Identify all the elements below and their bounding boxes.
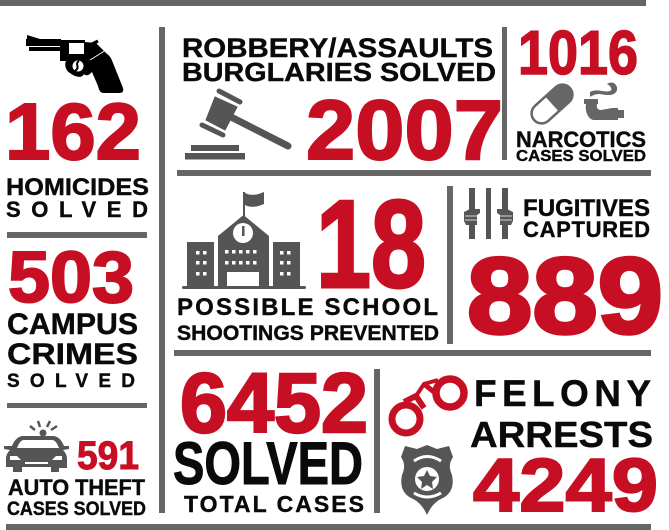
icon: hands on prison bars <box>464 188 513 239</box>
label: auto theft: AUTO THEFT <box>8 475 146 500</box>
panel: total cases <box>173 356 368 517</box>
label: burglaries solved: BURGLARIES SOLVED <box>182 57 496 87</box>
label: fugitives: FUGITIVES <box>523 195 650 222</box>
label: cases solved: CASES SOLVED <box>7 499 146 520</box>
number: 18: 18 <box>316 176 426 314</box>
label: solved: SOLVED <box>7 371 135 392</box>
number: 2007: 2007 <box>306 83 503 177</box>
number: 1016: 1016 <box>518 19 638 88</box>
icon: school <box>182 192 306 289</box>
label: captured: CAPTURED <box>523 217 650 242</box>
number: 162: 162 <box>5 87 141 176</box>
icon: capsule <box>527 81 577 127</box>
label: solved: SOLVED <box>6 197 148 222</box>
number: 889: 889 <box>467 235 663 356</box>
label: total cases: TOTAL CASES <box>184 491 364 517</box>
number: 503: 503 <box>8 238 134 318</box>
icon: handcuffs <box>392 379 464 433</box>
icon: pipe <box>584 83 624 120</box>
number: 591: 591 <box>77 434 139 478</box>
label: robbery/assaults: ROBBERY/ASSAULTS <box>182 33 493 63</box>
label: solved: SOLVED <box>173 430 363 497</box>
label: narcotics: NARCOTICS <box>516 127 646 152</box>
label: felony: FELONY <box>474 373 651 414</box>
panel: auto theft <box>4 421 146 520</box>
label: cases solved: CASES SOLVED <box>516 148 646 165</box>
panel: narcotics <box>516 19 646 165</box>
icon: police car <box>4 421 69 472</box>
panel: robbery and burglaries <box>182 33 503 177</box>
label: crimes: CRIMES <box>7 338 138 371</box>
label: homicides: HOMICIDES <box>6 174 149 201</box>
panel: fugitives <box>464 188 663 356</box>
panel: school shootings <box>177 176 439 345</box>
panel: homicides <box>5 35 149 222</box>
panel: campus crimes <box>7 238 138 392</box>
label: possible school: POSSIBLE SCHOOL <box>177 294 438 321</box>
panel: felony arrests <box>392 373 658 527</box>
number: 6452: 6452 <box>180 356 368 450</box>
icon: gavel <box>185 91 288 160</box>
icon: police badge <box>401 445 453 515</box>
number: 4249: 4249 <box>473 443 658 527</box>
icon: revolver <box>26 35 123 93</box>
label: arrests: ARRESTS <box>470 414 653 455</box>
label: shootings prevented: SHOOTINGS PREVENTED <box>177 322 439 345</box>
label: campus: CAMPUS <box>7 308 138 341</box>
